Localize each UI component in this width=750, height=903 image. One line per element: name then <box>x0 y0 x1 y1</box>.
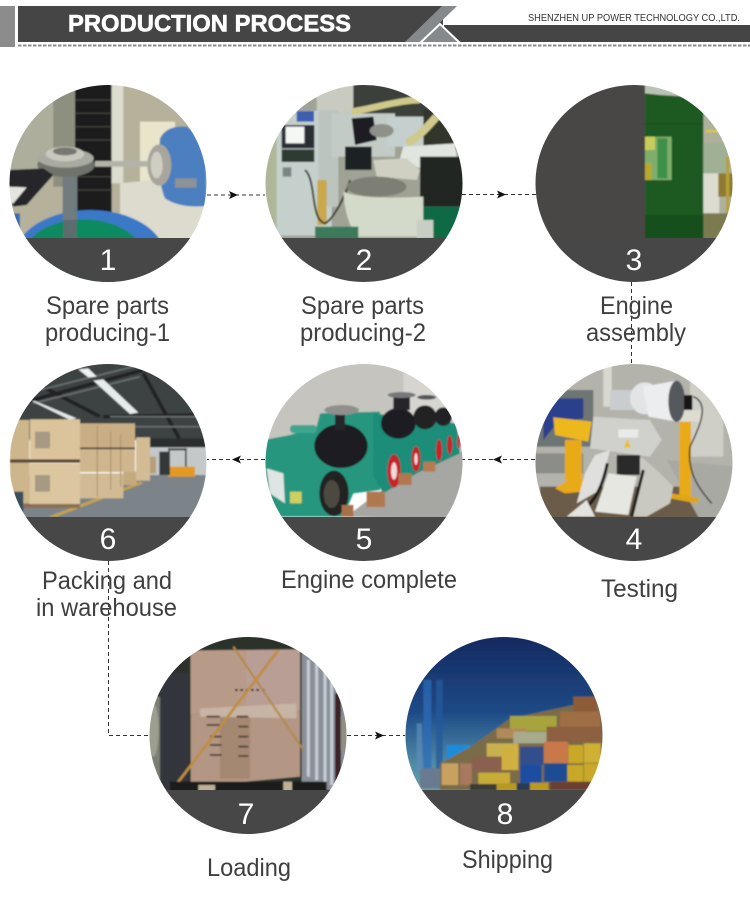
step 5 circle <box>266 364 462 561</box>
label: step 2: Spare parts <box>301 292 424 320</box>
step 7 circle <box>150 637 346 834</box>
step number 4: 4 <box>626 523 642 556</box>
step number 6: 6 <box>100 523 116 556</box>
step number 2: 2 <box>356 244 372 277</box>
step number 7: 7 <box>238 798 254 831</box>
label: step 7: Loading <box>207 854 291 882</box>
number band <box>552 238 716 282</box>
label: step 6: in warehouse <box>36 594 177 622</box>
number band <box>552 517 716 561</box>
label: step 6 <box>36 567 177 622</box>
label: step 1: Spare parts <box>46 292 169 320</box>
header banner <box>0 6 750 47</box>
label: step 1 <box>45 292 170 347</box>
number band <box>422 790 586 834</box>
number band <box>26 238 190 282</box>
number band <box>166 790 330 834</box>
label: step 8: Shipping <box>462 846 553 874</box>
step 2 circle <box>266 85 462 282</box>
number band <box>26 517 190 561</box>
label: step 2: producing-2 <box>300 319 426 347</box>
step number 3: 3 <box>626 244 642 277</box>
step number 1: 1 <box>100 244 116 277</box>
label: step 5: Engine complete <box>281 566 457 594</box>
label: step 4: Testing <box>601 575 678 603</box>
label: step 1: producing-1 <box>45 319 170 347</box>
label: step 3 <box>586 292 686 347</box>
label: step 3: assembly <box>586 319 686 347</box>
step number 5: 5 <box>356 523 372 556</box>
step 3 circle <box>536 85 732 282</box>
label: step 3: Engine <box>600 292 673 320</box>
number band <box>282 517 446 561</box>
flow arrowheads <box>229 190 506 740</box>
dashed flow connectors <box>108 194 632 736</box>
label: step 6: Packing and <box>42 567 172 595</box>
number band <box>282 238 446 282</box>
step 8 circle <box>406 637 602 834</box>
step 4 circle <box>536 364 732 561</box>
title: PRODUCTION PROCESS <box>68 10 351 38</box>
step 1 circle <box>10 85 206 282</box>
step 6 circle <box>10 364 206 561</box>
label: step 2 <box>300 292 426 347</box>
step number 8: 8 <box>497 798 513 831</box>
